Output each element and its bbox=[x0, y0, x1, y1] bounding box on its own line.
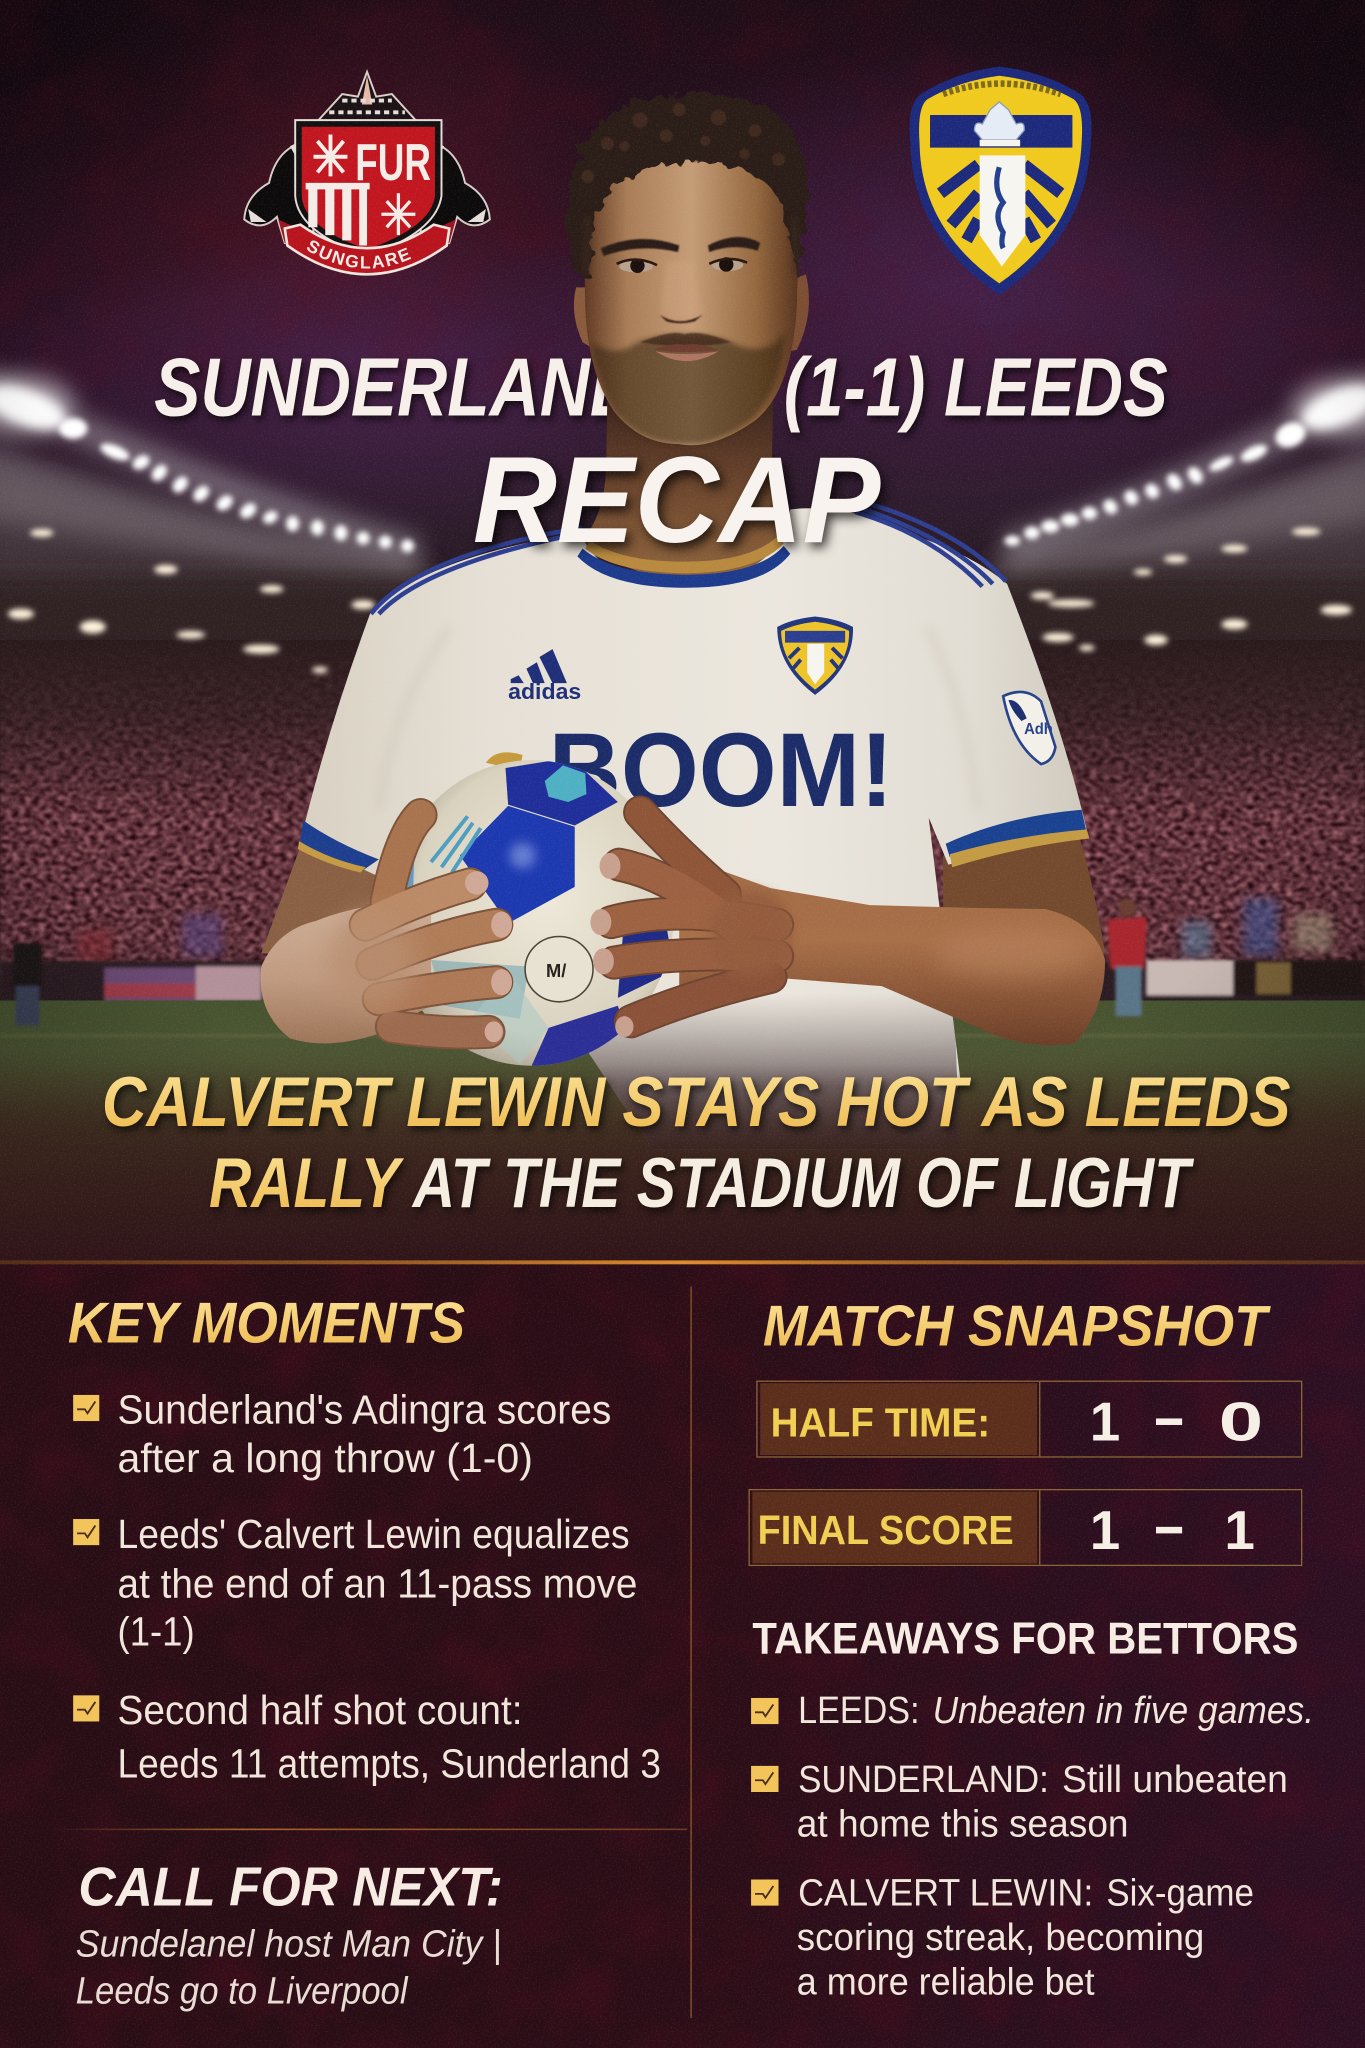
final score row: 1 bbox=[1224, 1499, 1255, 1561]
title line: Sunderland: SUNDERLAND bbox=[154, 342, 640, 433]
sleeve badge: Adh bbox=[1024, 721, 1053, 738]
collar bbox=[577, 536, 790, 588]
player upper arm right bbox=[943, 836, 1105, 967]
player shirt bbox=[298, 502, 1089, 1149]
takeaway: Calvert Lewin: Six-game bbox=[1106, 1873, 1254, 1915]
sponsor wordmark: BOOM! bbox=[549, 712, 893, 829]
crest shield: FUR bbox=[355, 134, 431, 192]
next fixtures: Leeds go to Liverpool bbox=[76, 1971, 409, 2013]
takeaway: Calvert Lewin: CALVERT LEWIN: bbox=[798, 1873, 1093, 1915]
shoulder stripes bbox=[371, 502, 1006, 614]
football: M/ bbox=[546, 960, 566, 981]
panel: takeaways for bettors bbox=[751, 1615, 1314, 2003]
crest crown bbox=[974, 102, 1024, 146]
stadium lights right bbox=[1004, 377, 1365, 549]
background figures bbox=[13, 899, 1147, 1025]
heading: call for next: CALL FOR NEXT: bbox=[78, 1856, 503, 1918]
final score row bbox=[749, 1490, 1302, 1565]
fade under the player bbox=[0, 1064, 1365, 1264]
player neck bbox=[575, 392, 799, 590]
takeaway: Calvert Lewin bbox=[751, 1873, 1254, 2003]
floodlight spots bbox=[8, 528, 1352, 673]
heading: takeaways: TAKEAWAYS FOR BETTORS bbox=[752, 1615, 1298, 1664]
takeaway: Sunderland bbox=[751, 1759, 1288, 1845]
shirt crest bbox=[777, 616, 853, 695]
takeaway: Sunderland: SUNDERLAND: bbox=[798, 1759, 1049, 1801]
crest ribbon bbox=[283, 223, 451, 276]
moment 3: Second half shot count: bbox=[118, 1687, 522, 1733]
final score row: FINAL SCORE bbox=[758, 1507, 1014, 1553]
pitch bbox=[0, 1000, 1365, 1264]
takeaway: Sunderland: Still unbeaten bbox=[1062, 1759, 1288, 1801]
player beard bbox=[592, 333, 785, 445]
heading: key moments: KEY MOMENTS bbox=[68, 1292, 465, 1356]
stadium lights left bbox=[0, 376, 418, 552]
moment 2: (1-1) bbox=[118, 1609, 195, 1655]
next fixtures: Sundelanel host Man City | bbox=[76, 1924, 502, 1966]
moment 1: after a long throw (1-0) bbox=[118, 1435, 533, 1481]
title word: RECAP: RECAP bbox=[473, 432, 881, 569]
crest peacock shield bbox=[980, 155, 1025, 266]
heading: match snapshot: MATCH SNAPSHOT bbox=[763, 1294, 1272, 1358]
final score row: 1 bbox=[1090, 1499, 1120, 1561]
next fixtures bbox=[76, 1924, 502, 2013]
sleeve cuff left bbox=[298, 820, 379, 872]
player face details bbox=[601, 237, 760, 361]
crest: Leeds bbox=[910, 67, 1092, 295]
takeaway: Leeds: Unbeaten in five games. bbox=[933, 1690, 1314, 1732]
panel: match snapshot bbox=[749, 1294, 1302, 1565]
adidas logo: adidas bbox=[508, 679, 581, 704]
takeaway: Calvert Lewin: scoring streak, becoming bbox=[797, 1917, 1204, 1959]
moment 3 bbox=[73, 1687, 661, 1787]
crest chevrons bbox=[940, 165, 1061, 240]
headline bbox=[102, 1062, 1291, 1222]
panel: key moments bbox=[68, 1292, 661, 1787]
sleeve cuff right bbox=[946, 810, 1089, 867]
adidas logo bbox=[508, 649, 581, 704]
crest ribbon: SUNGLARE bbox=[307, 240, 412, 268]
panel: call for next bbox=[76, 1856, 503, 2013]
stadium roof underside bbox=[0, 434, 1365, 679]
takeaway: Leeds bbox=[751, 1690, 1314, 1732]
half time row: 1 bbox=[1090, 1391, 1120, 1453]
crowd bbox=[0, 640, 1365, 993]
moment 1: Sunderland's Adingra scores bbox=[118, 1387, 611, 1433]
title line: score and Leeds: (1-1) LEEDS bbox=[784, 342, 1168, 433]
player head bbox=[568, 93, 809, 445]
takeaway: Calvert Lewin: a more reliable bet bbox=[797, 1961, 1095, 2003]
half time row bbox=[757, 1381, 1302, 1457]
moment 2: at the end of an 11-pass move bbox=[118, 1560, 637, 1606]
half time row: 0 bbox=[1219, 1391, 1263, 1453]
takeaway: Sunderland: at home this season bbox=[797, 1803, 1129, 1845]
headline: AT THE STADIUM OF LIGHT bbox=[411, 1143, 1195, 1222]
moment 3: Leeds 11 attempts, Sunderland 3 bbox=[118, 1741, 661, 1787]
moment 2: Leeds' Calvert Lewin equalizes bbox=[118, 1511, 630, 1557]
player upper arm left bbox=[261, 846, 392, 953]
takeaway: Leeds: LEEDS: bbox=[798, 1690, 920, 1732]
player hair bbox=[568, 93, 808, 281]
moment 1 bbox=[73, 1387, 611, 1481]
headline: RALLY bbox=[209, 1143, 405, 1222]
crest supporters bbox=[244, 138, 490, 243]
crest shield bbox=[295, 120, 442, 256]
right forearm and hand bbox=[590, 812, 1105, 1045]
advertising boards bbox=[0, 960, 1365, 1006]
half time row: HALF TIME: bbox=[771, 1400, 990, 1446]
left forearm and hand bbox=[261, 815, 512, 1043]
moment 2 bbox=[73, 1511, 637, 1655]
player illustration bbox=[261, 93, 1105, 1149]
bottom panel bbox=[0, 1260, 1365, 2048]
sleeve badge bbox=[1003, 692, 1055, 764]
crest: Sunderland bbox=[243, 69, 491, 276]
football bbox=[389, 752, 674, 1069]
crest crown bbox=[316, 72, 418, 123]
